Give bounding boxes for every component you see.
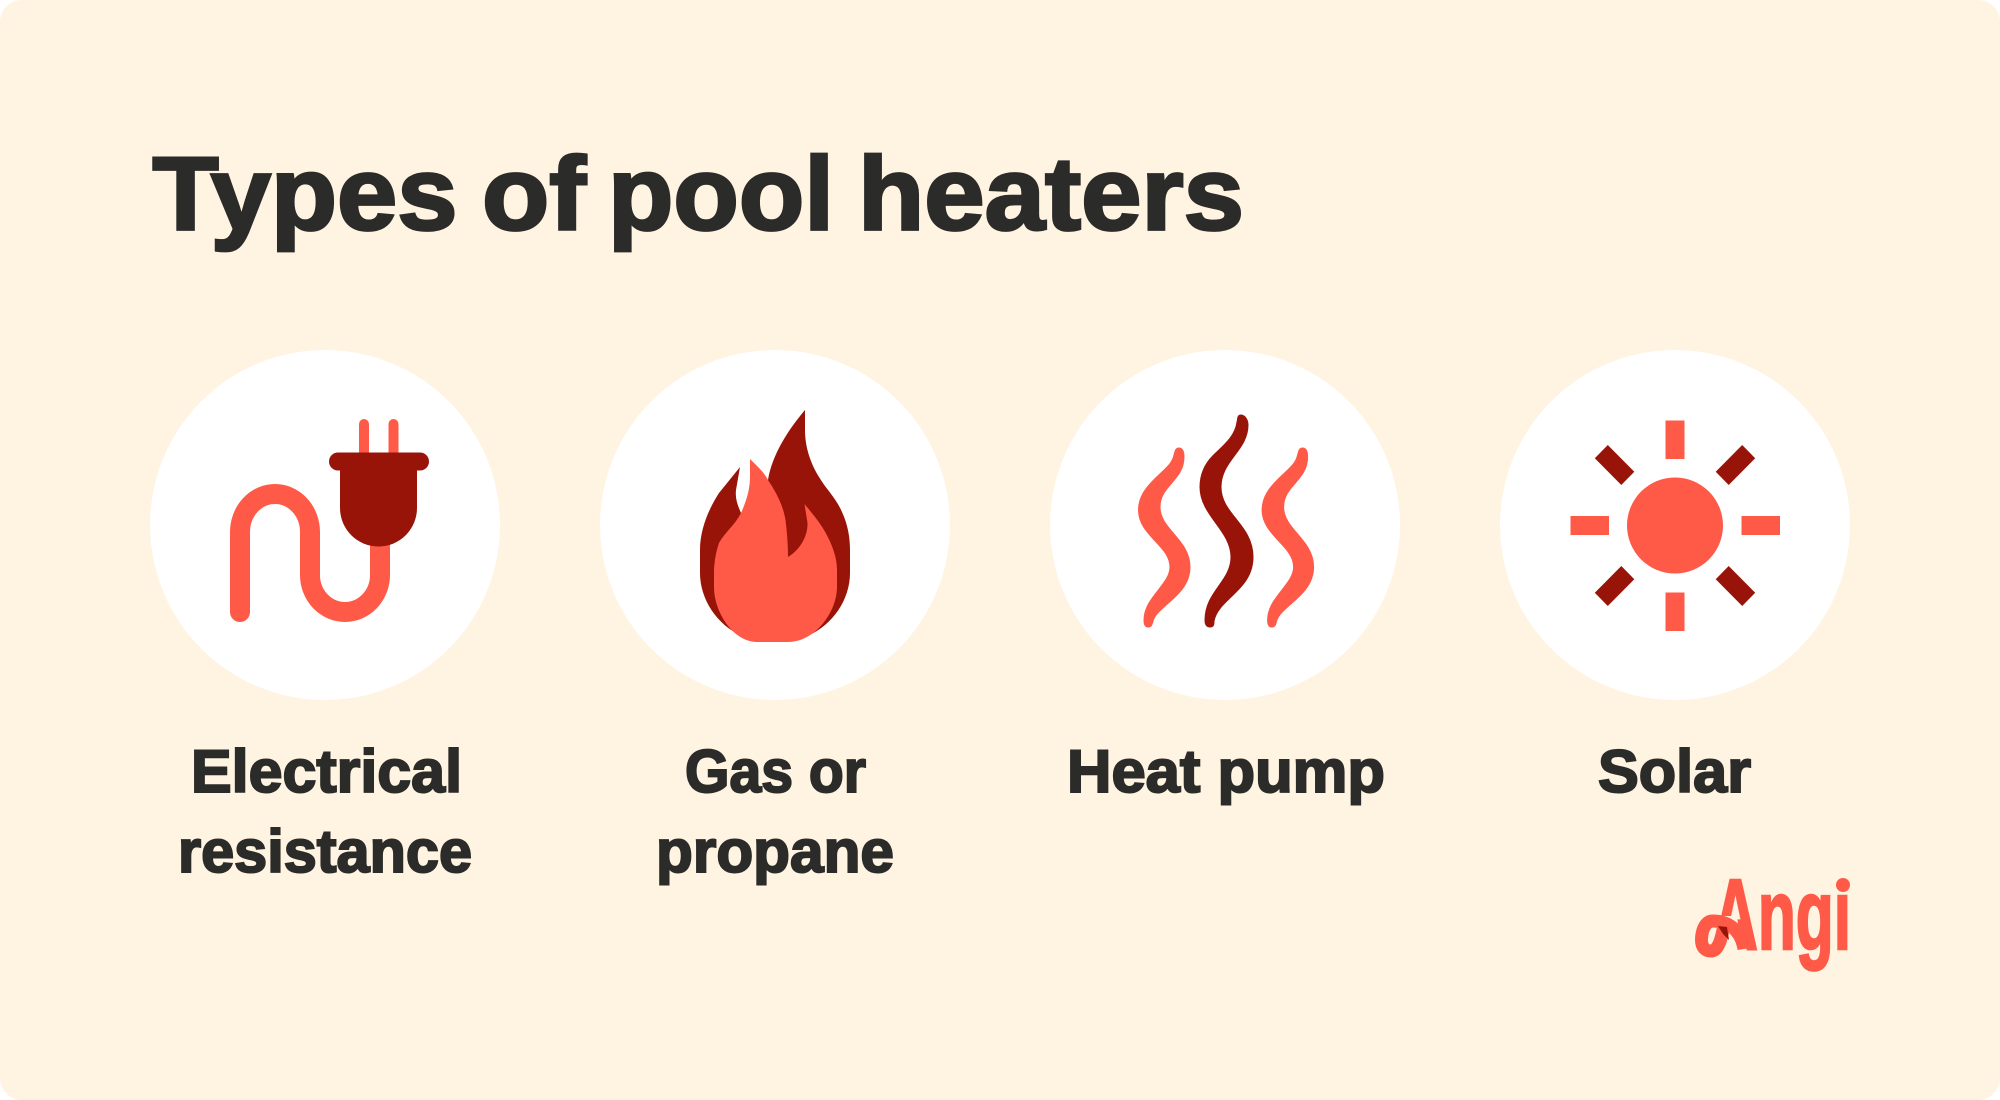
label: electrical resistance bbox=[178, 738, 472, 885]
label: solar: Solar bbox=[1598, 738, 1751, 805]
logo: Angi bbox=[1702, 859, 1853, 971]
title: of bbox=[482, 136, 586, 252]
panel: heat pump bbox=[1050, 350, 1400, 805]
title: Types bbox=[152, 136, 458, 252]
icon circle: gas bbox=[600, 350, 950, 700]
icon: heat waves bbox=[1140, 416, 1313, 626]
icon: sun bbox=[1570, 420, 1780, 631]
icon circle: electrical bbox=[150, 350, 500, 700]
title: pool bbox=[608, 136, 834, 252]
panel: electrical resistance bbox=[150, 350, 500, 885]
icon circle: solar bbox=[1500, 350, 1850, 700]
panel: solar bbox=[1500, 350, 1850, 805]
icon circle: heat pump bbox=[1050, 350, 1400, 700]
logo: Angi: Angi bbox=[1713, 859, 1851, 971]
label: electrical resistance: Electrical bbox=[191, 738, 462, 805]
label: electrical resistance: resistance bbox=[178, 818, 472, 885]
label: gas or propane: propane bbox=[656, 818, 894, 885]
icon: plug with cord bbox=[240, 419, 429, 612]
panel: gas or propane bbox=[600, 350, 950, 885]
label: gas or propane bbox=[656, 738, 894, 885]
label: gas or propane: Gas or bbox=[685, 738, 866, 805]
label: heat pump: Heat pump bbox=[1067, 738, 1385, 805]
title bbox=[152, 136, 1244, 252]
title: heaters bbox=[858, 136, 1244, 252]
icon: flame bbox=[700, 410, 850, 642]
